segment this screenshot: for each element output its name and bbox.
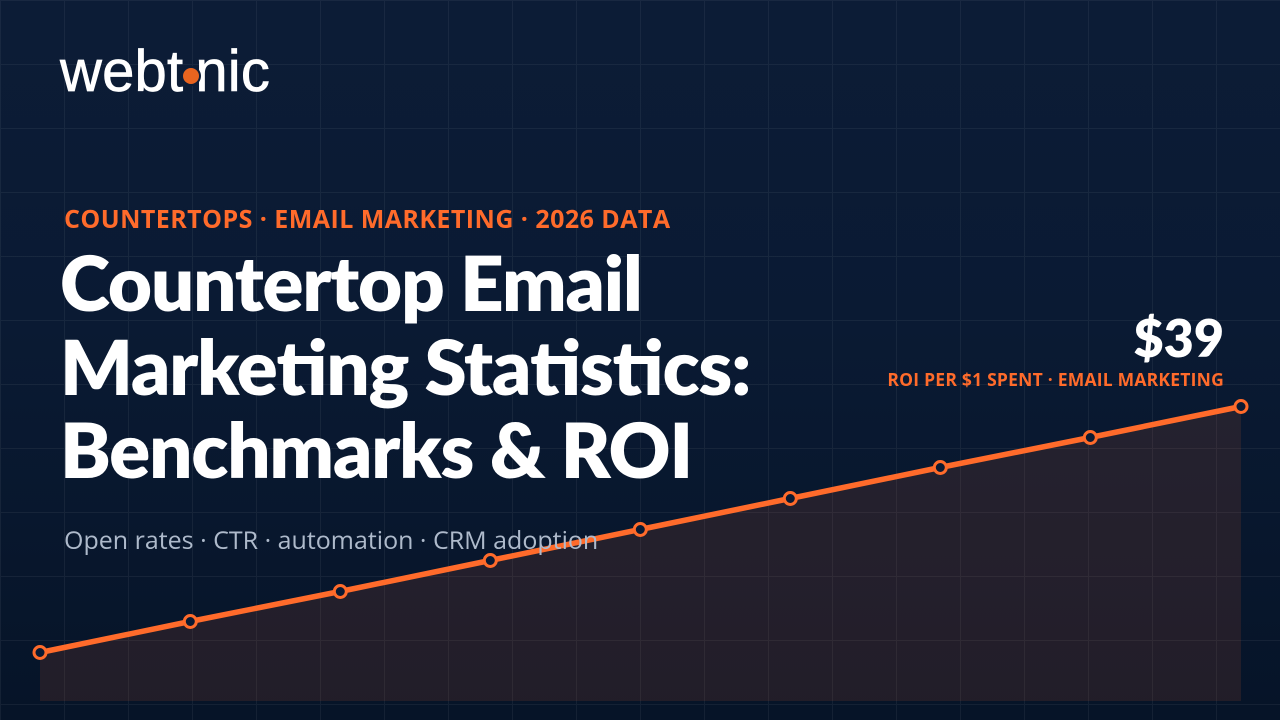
title: Marketing Statistics:	[60, 321, 750, 412]
title: Benchmarks & ROI	[60, 404, 692, 495]
eyebrow: COUNTERTOPS · EMAIL MARKETING · 2026 DATA	[64, 202, 671, 236]
title: Countertop Email	[60, 237, 642, 328]
ROI trend line	[40, 406, 1241, 652]
title	[60, 237, 750, 495]
stat label: ROI PER $1 SPENT · EMAIL MARKETING	[887, 368, 1224, 392]
subtitle: Open rates · CTR · automation · CRM adoption	[64, 523, 598, 557]
data point markers	[34, 400, 1247, 658]
logo: webtnic	[60, 39, 270, 104]
stat: $39: $39	[1134, 307, 1224, 369]
area under ROI line	[40, 406, 1241, 701]
